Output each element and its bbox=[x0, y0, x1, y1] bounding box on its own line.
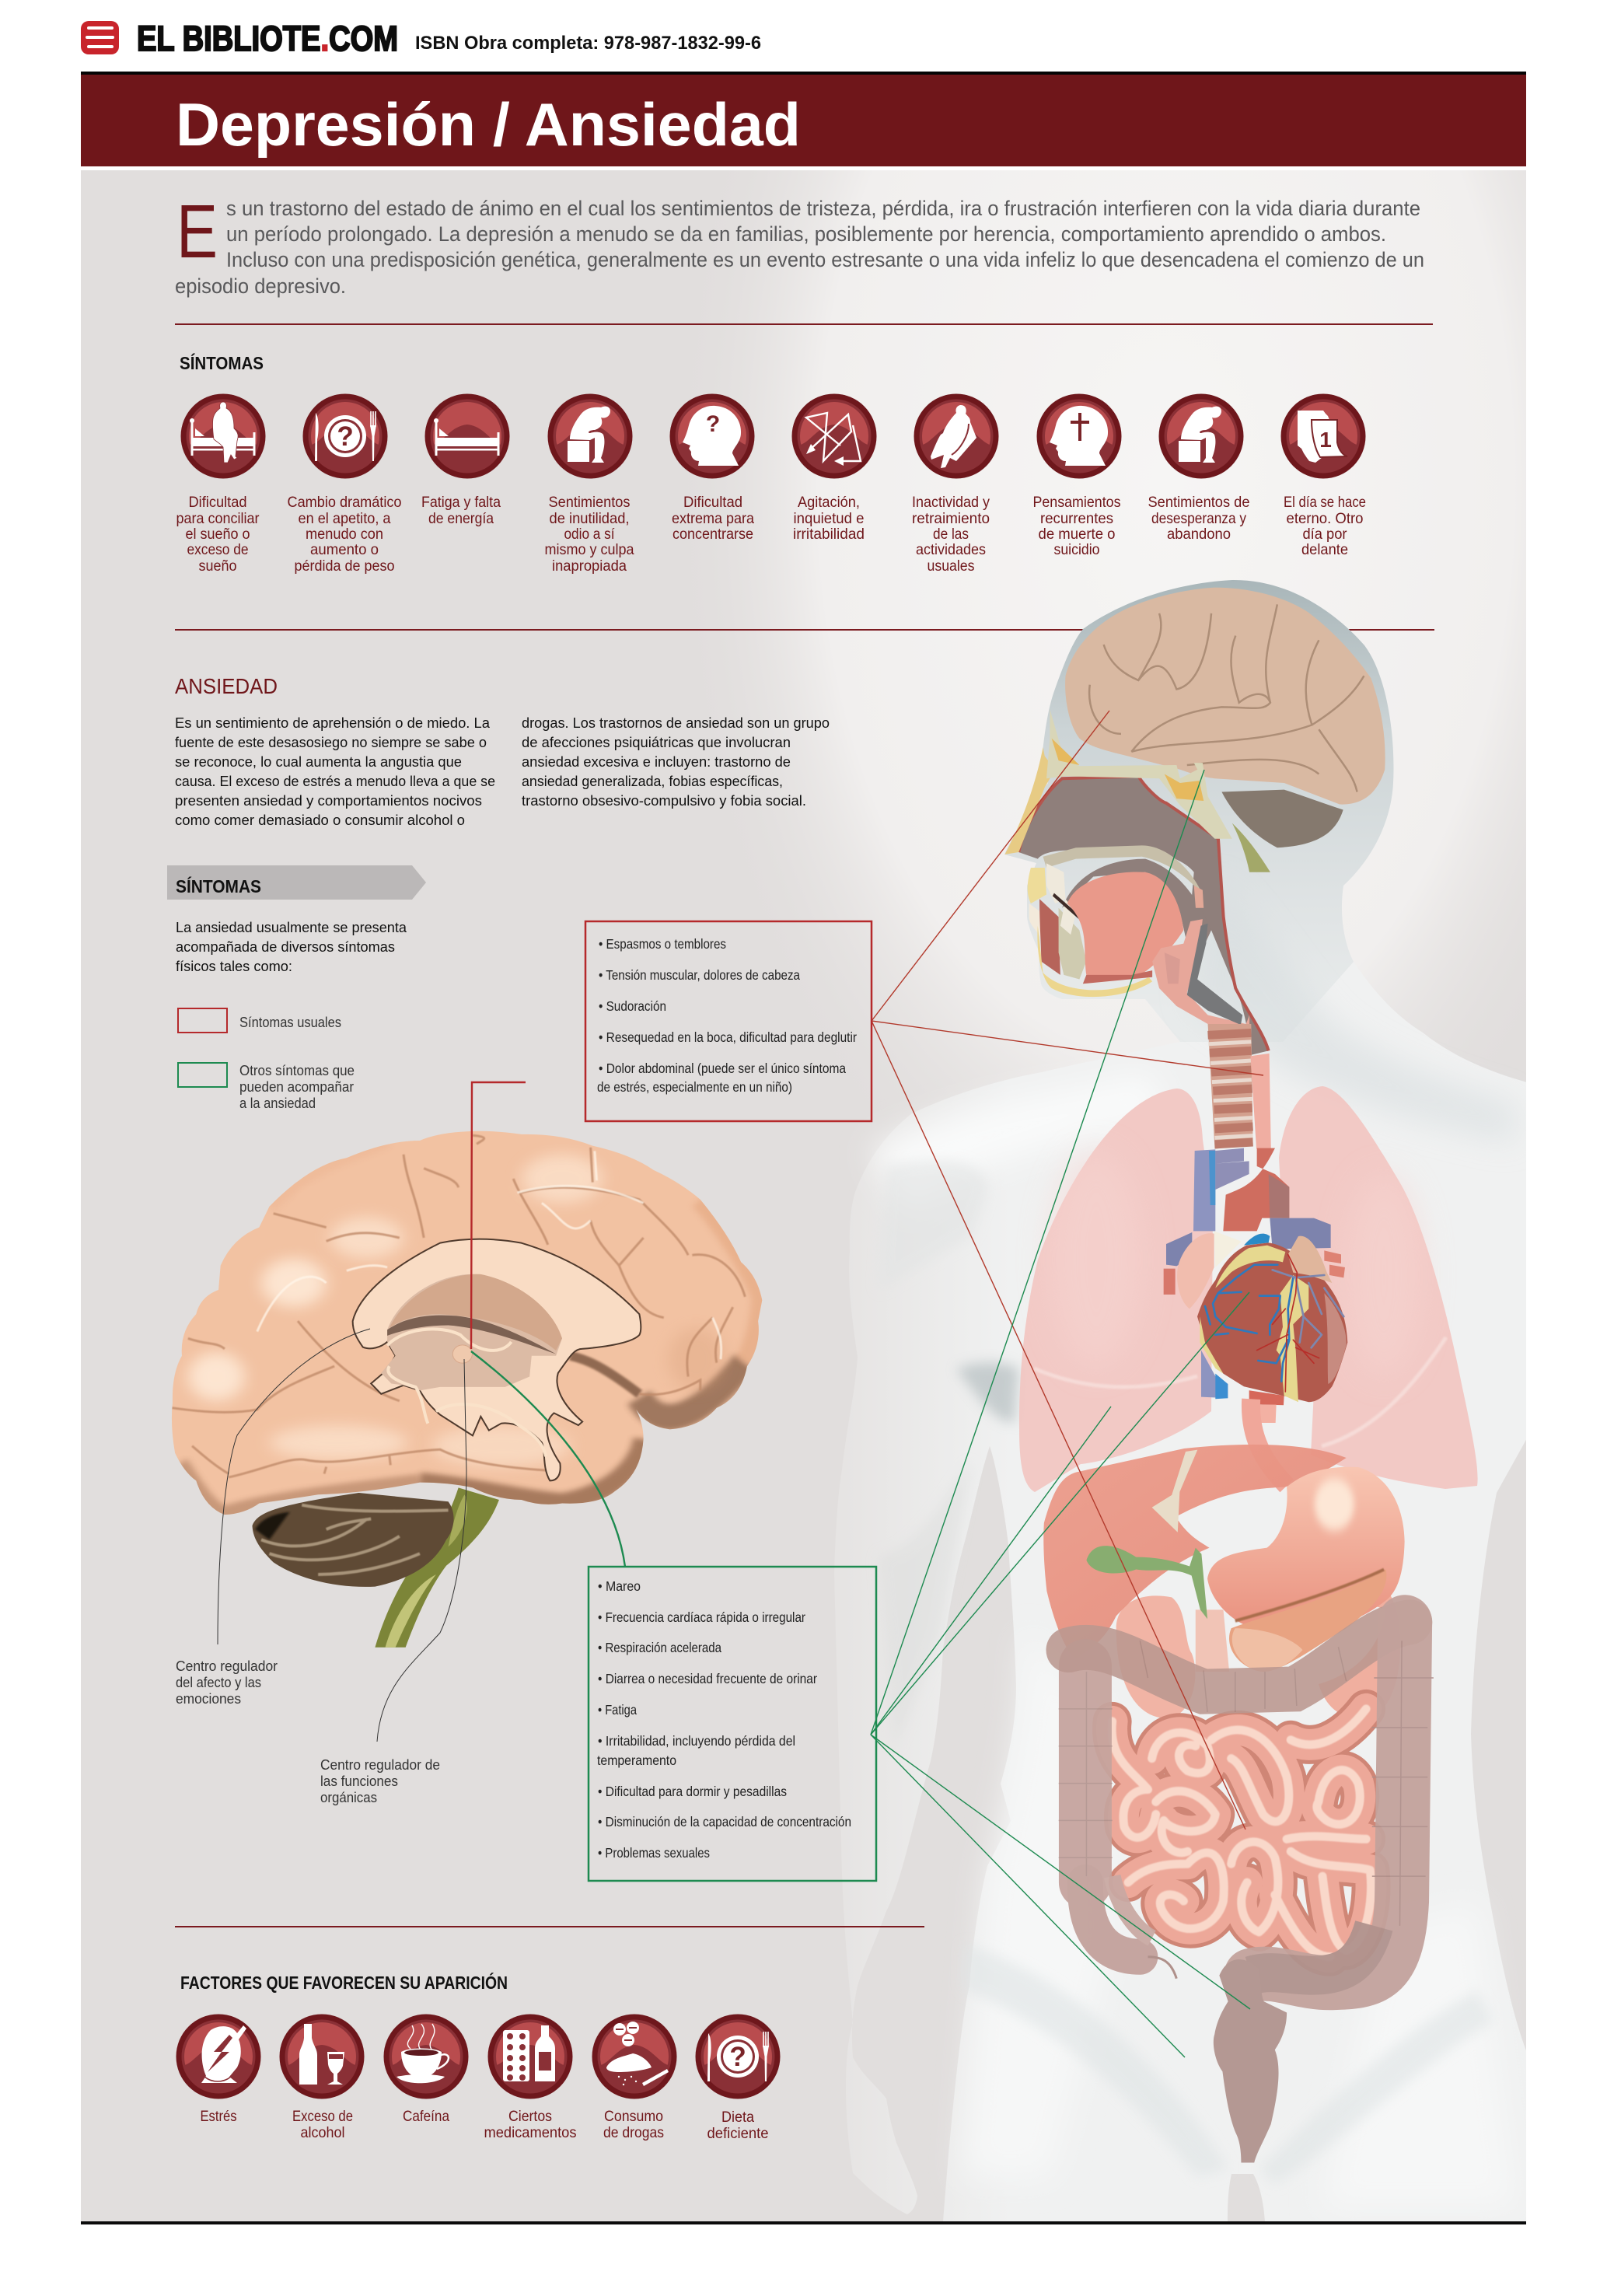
labels: symptom captions: menudo con bbox=[306, 526, 383, 543]
box: other symptoms: temperamento bbox=[597, 1753, 676, 1768]
heart and great vessels bbox=[1164, 1148, 1347, 1423]
icon: agitation, zigzag arrows bbox=[791, 393, 877, 479]
icon: worthlessness, seated person bbox=[547, 393, 633, 479]
labels: symptom captions: de las bbox=[933, 526, 969, 543]
anxiety paragraph, right column: ansiedad excesiva e incluyen: trastorno de bbox=[522, 753, 791, 770]
legend: usual symptoms: Síntomas usuales bbox=[239, 1015, 341, 1030]
labels: symptom captions: mismo y culpa bbox=[544, 541, 634, 558]
intro paragraph bbox=[175, 197, 1424, 298]
box: usual symptoms bbox=[585, 921, 872, 1121]
labels: symptom captions: Fatiga y falta bbox=[421, 494, 501, 511]
legend: other symptoms bbox=[178, 1063, 355, 1111]
nose and forehead skin bbox=[1004, 747, 1055, 854]
cerebellum bbox=[252, 1493, 454, 1587]
labels: symptom captions: de energía bbox=[428, 510, 494, 527]
labels: symptom captions: recurrentes bbox=[1040, 510, 1113, 527]
icon: alcohol, bottle and glass bbox=[280, 2014, 364, 2099]
anxiety symptoms intro: La ansiedad usualmente se presenta bbox=[176, 919, 407, 935]
icon: eternal day, calendar: 1 bbox=[1319, 428, 1332, 452]
labels: factors captions: medicamentos bbox=[484, 2124, 577, 2141]
labels: symptom captions: El día se hace bbox=[1284, 494, 1366, 511]
labels: symptom captions: Sentimientos bbox=[549, 494, 631, 511]
heading: factores: FACTORES QUE FAVORECEN SU APARICIÓN bbox=[180, 1972, 508, 1993]
anxiety paragraph, right column: de afecciones psiquiátricas que involucran bbox=[522, 734, 791, 750]
ISBN line: ISBN Obra completa: 978-987-1832-99-6 bbox=[415, 33, 761, 54]
icon: hopelessness, seated person bbox=[1158, 393, 1244, 479]
anxiety paragraph, left column: se reconoce, lo cual aumenta la angustia que bbox=[175, 753, 462, 770]
labels: symptom captions bbox=[176, 494, 1366, 575]
labels: symptom captions: Agitación, bbox=[798, 494, 860, 511]
intro paragraph: un período prolongado. La depresión a menudo se da en familias, posiblemente por herencia, comportamiento aprendido o ambos. bbox=[226, 222, 1386, 246]
labels: symptom captions: desesperanza y bbox=[1151, 510, 1246, 527]
illustration: human body with organs bbox=[834, 575, 1527, 2221]
anxiety paragraph, right column: ansiedad generalizada, fobias específicas, bbox=[522, 773, 783, 789]
anxiety symptoms intro: físicos tales como: bbox=[176, 958, 292, 974]
lips and mouth bbox=[1028, 868, 1046, 903]
callout line: red from brain to box bbox=[471, 1082, 526, 1349]
icon: insomnia, person sitting on bed bbox=[180, 393, 266, 479]
label: centro regulador de funciones: las funciones bbox=[320, 1774, 398, 1789]
intro paragraph: s un trastorno del estado de ánimo en el cual los sentimientos de tristeza, pérdida, ira o frustración interfieren con la vida diaria durante bbox=[226, 197, 1420, 220]
small brain bbox=[1065, 588, 1385, 805]
icon: concentration, head with question mark: ? bbox=[706, 411, 720, 437]
heading: ansiedad: ANSIEDAD bbox=[175, 674, 278, 698]
labels: factors captions: de drogas bbox=[603, 2124, 664, 2141]
box: other symptoms: • Mareo bbox=[598, 1578, 641, 1594]
box: usual symptoms: de estrés, especialmente en un niño) bbox=[597, 1079, 792, 1095]
colon: ascending bbox=[1059, 1665, 1176, 1979]
anxiety paragraph, left column: fuente de este desasosiego no siempre se sabe o bbox=[175, 734, 487, 750]
box: other symptoms: • Dificultad para dormir y pesadillas bbox=[598, 1784, 787, 1799]
label: centro regulador del afecto: Centro regulador bbox=[176, 1658, 278, 1674]
box: other symptoms: • Respiración acelerada bbox=[598, 1640, 721, 1655]
rectum bbox=[1214, 1959, 1287, 2162]
icon: thoughts of death, head with cross bbox=[1037, 393, 1121, 479]
chin skin bbox=[1037, 926, 1152, 997]
lower esophagus bbox=[1251, 1399, 1287, 1486]
callout line: green from brain to box bbox=[471, 1351, 625, 1567]
green symptom lines to organs bbox=[871, 770, 1250, 2057]
anxiety paragraph, left column bbox=[175, 715, 495, 828]
anxiety symptoms intro: acompañada de diversos síntomas bbox=[176, 938, 395, 955]
heart muscle bbox=[1197, 1242, 1347, 1402]
callout line: centro regulador del afecto bbox=[218, 1329, 370, 1644]
intro paragraph: Incluso con una predisposición genética, generalmente es un evento estresante o una vida infeliz lo que desencadena el comienzo de un bbox=[226, 248, 1424, 271]
icon: appetite, plate with question mark: ? bbox=[337, 421, 354, 452]
labels: factors captions: Cafeína bbox=[403, 2108, 449, 2125]
labels: symptom captions: aumento o bbox=[310, 541, 379, 558]
lower black rule bbox=[81, 2221, 1526, 2224]
legend: other symptoms: Otros síntomas que bbox=[239, 1063, 355, 1078]
icon: poor diet, plate bbox=[695, 2014, 781, 2099]
box: other symptoms: • Disminución de la capacidad de concentración bbox=[598, 1814, 851, 1829]
nasal cavity and pharynx bbox=[1018, 776, 1269, 1055]
sinus bbox=[1165, 774, 1204, 801]
tongue bbox=[1067, 872, 1183, 980]
abdomen organs bbox=[1043, 1399, 1434, 2162]
cerebrum shading and folds bbox=[172, 1135, 761, 1515]
icon: medicines, blister and bottle bbox=[488, 2014, 572, 2099]
inner limbic cavity bbox=[381, 1274, 562, 1390]
label: centro regulador del afecto: del afecto y las bbox=[176, 1675, 261, 1690]
brain stem bbox=[375, 1487, 499, 1648]
limbic system outline bbox=[353, 1239, 641, 1480]
labels: symptom captions: día por bbox=[1303, 526, 1347, 543]
labels: symptom captions: Dificultad bbox=[683, 494, 742, 511]
gallbladder bbox=[1086, 1546, 1207, 1619]
labels: symptom captions: Pensamientos bbox=[1032, 494, 1121, 511]
icon: eternal day, calendar bbox=[1281, 393, 1365, 479]
jaw bone and teeth bbox=[1059, 908, 1086, 980]
labels: symptom captions: de muerte o bbox=[1039, 526, 1116, 543]
anxiety paragraph, right column: trastorno obsesivo-compulsivo y fobia social. bbox=[522, 792, 806, 809]
labels: symptom captions: delante bbox=[1301, 541, 1348, 558]
labels: symptom captions: pérdida de peso bbox=[294, 557, 395, 575]
fornix bbox=[387, 1329, 546, 1456]
icon: appetite, plate with question mark bbox=[303, 393, 387, 479]
labels: symptom captions: el sueño o bbox=[185, 526, 250, 543]
top black rule bbox=[81, 72, 1526, 75]
heading: síntomas de depresión: SÍNTOMAS bbox=[180, 352, 264, 373]
lungs bbox=[1019, 1086, 1478, 1492]
palate bbox=[1043, 845, 1200, 889]
labels: symptom captions: inapropiada bbox=[552, 557, 627, 575]
liver bbox=[1043, 1445, 1347, 1658]
label: centro regulador de funciones bbox=[320, 1757, 440, 1805]
labels: factors captions: Consumo bbox=[604, 2108, 663, 2125]
labels: factors captions: Exceso de bbox=[292, 2108, 353, 2125]
intro drop cap: E bbox=[176, 189, 218, 274]
colon: transverse bbox=[1068, 1622, 1410, 1712]
label: centro regulador de funciones: orgánicas bbox=[320, 1790, 377, 1805]
box: usual symptoms: • Resequedad en la boca, dificultad para deglutir bbox=[599, 1029, 857, 1045]
trachea bbox=[1208, 1024, 1253, 1149]
label: centro regulador del afecto bbox=[176, 1658, 278, 1707]
box: other symptoms: • Problemas sexuales bbox=[598, 1845, 710, 1861]
box: other symptoms: • Irritabilidad, incluyendo pérdida del bbox=[598, 1733, 795, 1749]
esophagus bbox=[1250, 1054, 1271, 1149]
epiglottis and larynx bbox=[1152, 919, 1249, 1029]
anxiety paragraph, left column: causa. El exceso de estrés a menudo lleva a que se bbox=[175, 773, 495, 789]
labels: symptom captions: odio a sí bbox=[564, 526, 615, 543]
icon: concentration, head with question mark bbox=[670, 393, 754, 479]
icon: inactivity, person in armchair bbox=[914, 393, 998, 479]
body shading bbox=[871, 879, 1516, 2208]
callout line: centro regulador de funciones orgánicas bbox=[377, 1359, 466, 1742]
icon: caffeine, coffee cup bbox=[384, 2014, 468, 2099]
labels: symptom captions: actividades bbox=[916, 541, 986, 558]
anxiety paragraph, left column: Es un sentimiento de aprehensión o de miedo. La bbox=[175, 715, 491, 731]
labels: symptom captions: extrema para bbox=[672, 510, 754, 527]
anxiety paragraph, left column: presenten ansiedad y comportamientos nocivos bbox=[175, 792, 482, 809]
labels: factors captions: deficiente bbox=[707, 2125, 768, 2142]
labels: symptom captions: Dificultad bbox=[188, 494, 247, 511]
icon: poor diet, plate: ? bbox=[729, 2042, 746, 2072]
labels: symptom captions: abandono bbox=[1167, 526, 1231, 543]
legend: other symptoms: a la ansiedad bbox=[239, 1096, 316, 1111]
box: usual symptoms: • Espasmos o temblores bbox=[599, 936, 726, 952]
legend: usual symptoms bbox=[178, 1008, 341, 1033]
head section and brain bbox=[1004, 588, 1385, 1149]
box: usual symptoms: • Sudoración bbox=[599, 998, 666, 1014]
box: usual symptoms: • Tensión muscular, dolores de cabeza bbox=[599, 967, 800, 983]
title band bbox=[81, 75, 1526, 166]
labels: symptom captions: Inactividad y bbox=[912, 494, 990, 511]
labels: symptom captions: suicidio bbox=[1054, 541, 1100, 558]
icon: drugs, pills and powder bbox=[592, 2014, 676, 2099]
legend: other symptoms: pueden acompañar bbox=[239, 1079, 354, 1095]
icon: fatigue, bed with hump bbox=[424, 393, 510, 479]
large brain cross-section bbox=[172, 1131, 762, 1648]
skull base bone bbox=[1046, 709, 1232, 839]
anxiety paragraph, right column: drogas. Los trastornos de ansiedad son un grupo bbox=[522, 715, 830, 731]
labels: symptom captions: eterno. Otro bbox=[1286, 510, 1364, 527]
anxiety paragraph, right column bbox=[522, 715, 830, 809]
logo: El Biblioteco: EL BIBLIOTE.COM bbox=[137, 19, 398, 58]
labels: factors captions bbox=[201, 2108, 768, 2142]
box: usual symptoms: • Dolor abdominal (puede ser el único síntoma bbox=[599, 1061, 846, 1076]
labels: symptom captions: usuales bbox=[927, 557, 975, 575]
label: centro regulador de funciones: Centro regulador de bbox=[320, 1757, 440, 1773]
labels: symptom captions: concentrarse bbox=[672, 526, 753, 543]
small intestine bbox=[1112, 1709, 1371, 1957]
red symptom lines to organs bbox=[872, 711, 1263, 1829]
labels: symptom captions: irritabilidad bbox=[793, 526, 865, 543]
hypothalamus nucleus bbox=[452, 1345, 472, 1363]
duodenum and aorta tube bbox=[1116, 1595, 1195, 1718]
labels: symptom captions: inquietud e bbox=[793, 510, 865, 527]
cerebellum bbox=[1221, 790, 1343, 847]
box: other symptoms: • Fatiga bbox=[598, 1702, 637, 1718]
body silhouette bbox=[834, 580, 1527, 2221]
stomach bbox=[1207, 1467, 1405, 1632]
box: other symptoms: • Diarrea o necesidad frecuente de orinar bbox=[598, 1671, 817, 1686]
labels: symptom captions: en el apetito, a bbox=[299, 510, 391, 527]
label: centro regulador del afecto: emociones bbox=[176, 1691, 241, 1707]
labels: symptom captions: Cambio dramático bbox=[288, 494, 402, 511]
labels: symptom captions: de inutilidad, bbox=[549, 510, 630, 527]
box: other symptoms: • Frecuencia cardíaca rápida o irregular bbox=[598, 1609, 805, 1625]
coronary vessels bbox=[1205, 1254, 1343, 1392]
mouth cavity bbox=[1062, 858, 1211, 941]
labels: factors captions: Dieta bbox=[721, 2109, 754, 2126]
labels: symptom captions: exceso de bbox=[187, 541, 249, 558]
intro paragraph: episodio depresivo. bbox=[175, 274, 346, 298]
head tint inside skull bbox=[1004, 580, 1393, 1009]
labels: symptom captions: retraimiento bbox=[912, 510, 990, 527]
labels: symptom captions: para conciliar bbox=[176, 510, 260, 527]
colon: descending bbox=[1251, 1622, 1434, 1983]
icon: stress, head with lightning bbox=[176, 2014, 261, 2099]
labels: factors captions: Estrés bbox=[201, 2108, 237, 2125]
banner: síntomas: SÍNTOMAS bbox=[176, 875, 261, 896]
labels: factors captions: alcohol bbox=[300, 2124, 345, 2141]
anxiety paragraph, left column: como comer demasiado o consumir alcohol o bbox=[175, 812, 465, 828]
box: other symptoms bbox=[589, 1567, 876, 1881]
labels: symptom captions: Sentimientos de bbox=[1148, 494, 1250, 511]
title: Depresión / Ansiedad bbox=[176, 90, 801, 159]
labels: symptom captions: sueño bbox=[199, 557, 237, 575]
pancreas bbox=[1229, 1570, 1386, 1672]
brain stem bbox=[1232, 823, 1270, 872]
cerebrum bbox=[172, 1131, 762, 1515]
anxiety symptoms intro bbox=[176, 919, 407, 974]
labels: factors captions: Ciertos bbox=[508, 2108, 552, 2125]
corpus callosum band bbox=[390, 1274, 562, 1351]
banner: síntomas bbox=[167, 865, 426, 900]
